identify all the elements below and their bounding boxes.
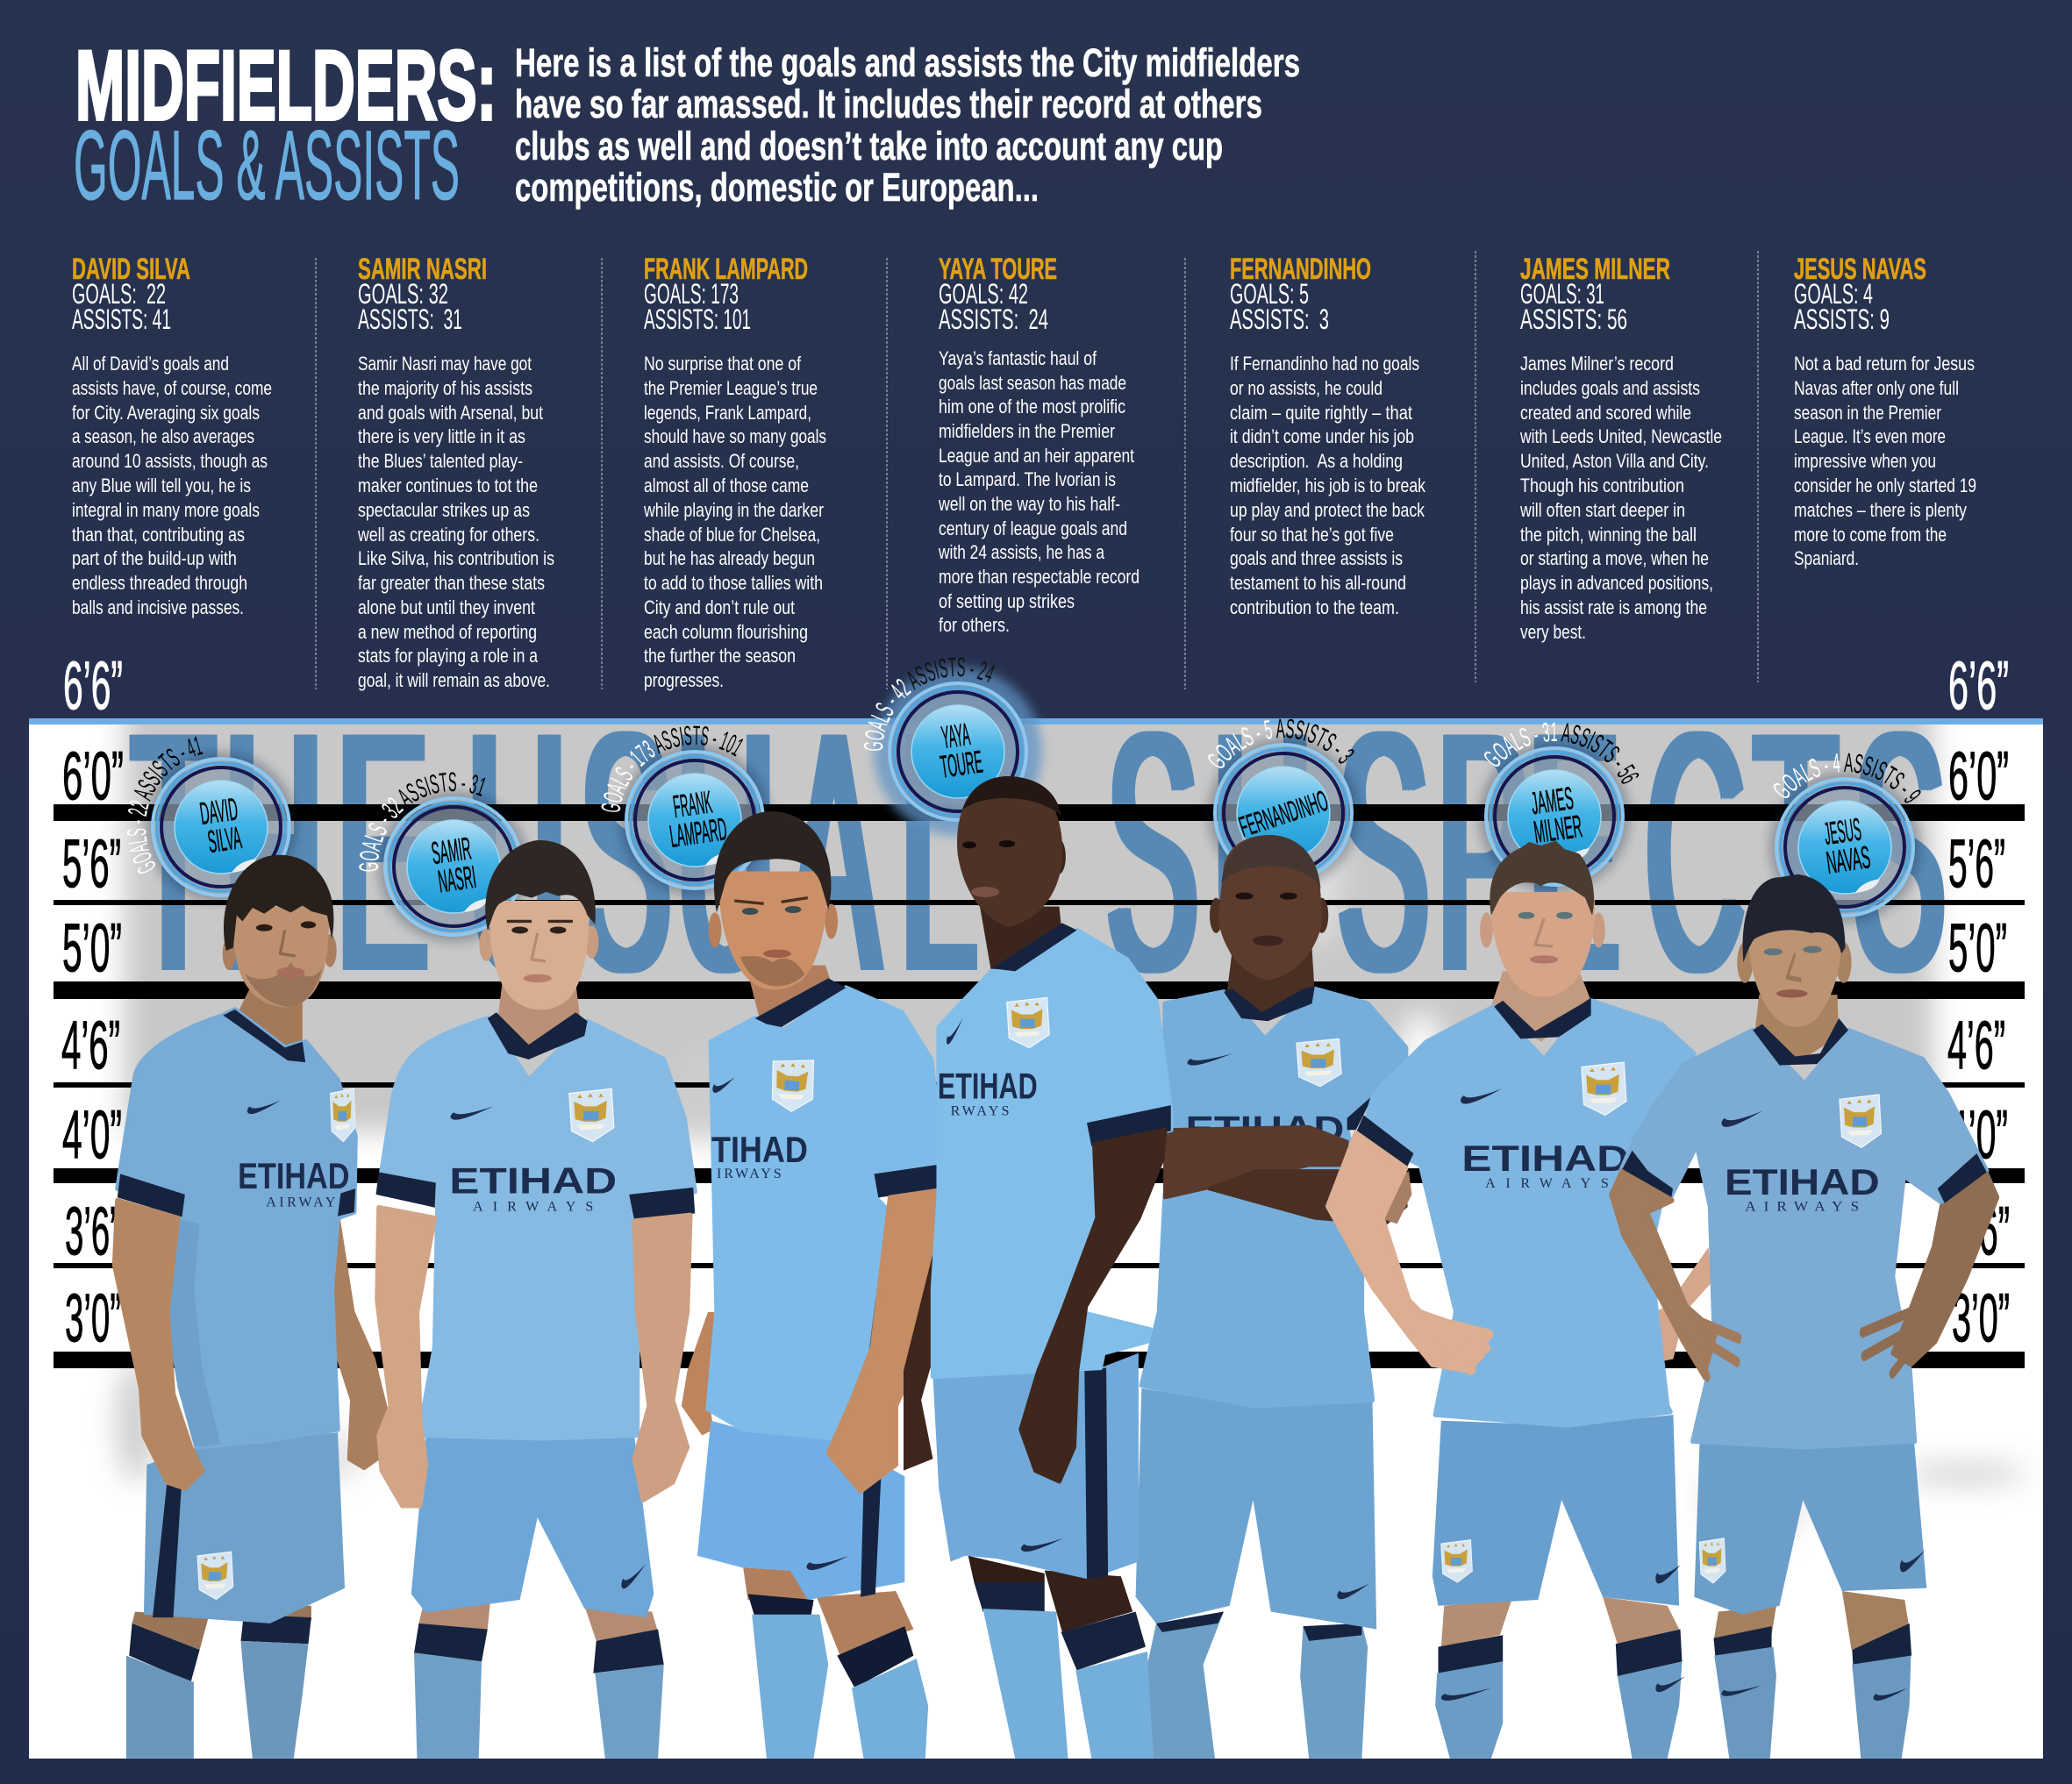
column: Samir Nasri: well as creating for others. xyxy=(357,524,539,546)
column: Frank Lampard: shade of blue for Chelsea, xyxy=(644,524,820,546)
column: Yaya Toure: for others. xyxy=(939,614,1010,636)
sponsor: Etihad Airways xyxy=(449,1160,617,1215)
badge: Yaya Toure: YAYA xyxy=(940,716,972,755)
sponsor: Etihad Airways: AIRWAYS xyxy=(473,1200,593,1215)
column: David Silva: GOALS: 22 xyxy=(72,278,166,310)
column: Yaya Toure: with 24 assists, he has a xyxy=(938,541,1104,563)
column: Frank Lampard: FRANK LAMPARD xyxy=(644,253,808,286)
column: Jesus Navas: ASSISTS: 9 xyxy=(1794,303,1890,335)
column: James Milner: United, Aston Villa and City. xyxy=(1520,450,1709,472)
badge: Fernandinho: FERNANDINHO xyxy=(1235,784,1332,843)
badge: Fernandinho: GOALS - 5 ASSISTS - 3 xyxy=(1208,719,1354,768)
big heading: the usual suspects: THE USUAL SUSPECTS xyxy=(132,660,1946,1043)
height labels left: 4’6” xyxy=(61,1006,120,1083)
column: Frank Lampard: No surprise that one of xyxy=(644,353,802,375)
badge: James Milner: GOALS - 31 ASSISTS - 56 xyxy=(1484,723,1639,784)
column: Frank Lampard: progresses. xyxy=(644,669,724,691)
sponsor: Etihad Airways: RWAYS xyxy=(951,1103,1010,1118)
column: Fernandinho: claim – quite rightly – that xyxy=(1230,402,1413,424)
column: David Silva: any Blue will tell you, he is xyxy=(72,475,251,496)
column: Frank Lampard: the further the season xyxy=(644,645,796,667)
column: James Milner: plays in advanced positions, xyxy=(1520,572,1713,594)
column: Yaya Toure: century of league goals and xyxy=(939,517,1127,539)
badge: David Silva xyxy=(126,737,300,908)
intro text: competitions, domestic or European... xyxy=(515,165,1039,210)
column: Samir Nasri: and goals with Arsenal, but xyxy=(358,402,544,424)
column: Samir Nasri: goal, it will remain as above. xyxy=(358,669,550,691)
height labels left xyxy=(61,646,124,1356)
column: Yaya Toure: YAYA TOURE xyxy=(939,253,1057,286)
column: David Silva: a season, he also averages xyxy=(72,425,254,447)
column: David Silva: around 10 assists, though as xyxy=(72,450,268,472)
column: James Milner: his assist rate is among the xyxy=(1520,596,1707,618)
column: Jesus Navas: GOALS: 4 xyxy=(1794,278,1873,310)
column: Fernandinho: description. As a holding xyxy=(1230,450,1403,472)
badge: Yaya Toure: TOURE xyxy=(938,743,985,785)
badge: Frank Lampard: GOALS - 173 ASSISTS - 101 xyxy=(602,726,744,812)
big heading: the usual suspects: THE USUAL SUSPECTS xyxy=(134,660,1948,1043)
player: David Silva xyxy=(114,855,388,1759)
column: Fernandinho: it didn’t come under his job xyxy=(1230,425,1414,447)
sponsor: Etihad Airways: AIRWAYS xyxy=(1485,1176,1609,1191)
badge: James Milner: MILNER xyxy=(1532,808,1584,850)
height labels left: 5’0” xyxy=(62,909,122,986)
height labels left: 3’0” xyxy=(65,1279,121,1356)
column: Frank Lampard: and assists. Of course, xyxy=(644,450,799,472)
column: James Milner: ASSISTS: 56 xyxy=(1520,303,1627,335)
badge: Frank Lampard xyxy=(602,726,774,900)
height labels left: 5’6” xyxy=(62,824,121,902)
column: Yaya Toure: him one of the most prolific xyxy=(939,396,1125,417)
column: David Silva xyxy=(72,253,272,618)
column: David Silva: than that, contributing as xyxy=(72,524,245,546)
column: David Silva: part of the build-up with xyxy=(72,547,237,569)
column: David Silva: ASSISTS: 41 xyxy=(72,303,171,335)
column: Frank Lampard: each column flourishing xyxy=(644,621,808,643)
badge: Jesus Navas: NAVAS xyxy=(1824,838,1873,881)
column: James Milner: the pitch, winning the ball xyxy=(1520,524,1697,546)
column: Samir Nasri xyxy=(357,253,554,691)
column: Frank Lampard: while playing in the darker xyxy=(643,499,824,521)
column: Jesus Navas xyxy=(1794,253,1976,569)
badge: Samir Nasri xyxy=(359,772,530,947)
column: Yaya Toure xyxy=(938,253,1140,636)
column: James Milner xyxy=(1519,253,1722,643)
sponsor: Etihad Airways: ETIHAD xyxy=(938,1066,1038,1107)
player: James Milner xyxy=(1328,841,1711,1759)
column: James Milner: GOALS: 31 xyxy=(1520,278,1604,310)
badge: David Silva: GOALS - 22 ASSISTS - 41 xyxy=(126,737,204,874)
title: midfielders: MIDFIELDERS: xyxy=(75,31,497,140)
column: Jesus Navas: Not a bad return for Jesus xyxy=(1794,353,1975,375)
column: Fernandinho: FERNANDINHO xyxy=(1230,253,1371,286)
column: Frank Lampard: ASSISTS: 101 xyxy=(644,303,751,335)
height labels right xyxy=(1947,646,2010,1356)
column: David Silva: integral in many more goals xyxy=(72,499,260,521)
height labels right: 3’0” xyxy=(1952,1279,2010,1356)
intro text: Here is a list of the goals and assists the City midfielders xyxy=(515,40,1300,85)
column: James Milner: includes goals and assists xyxy=(1520,377,1700,399)
sponsor: Etihad Airways: AIRWAYS xyxy=(1745,1198,1859,1215)
height labels right: 5’6” xyxy=(1948,824,2005,902)
height chart panel xyxy=(29,718,2043,1759)
column: Fernandinho: If Fernandinho had no goals xyxy=(1230,353,1419,375)
sponsor: Etihad Airways: ETIHAD xyxy=(1725,1163,1880,1203)
column: David Silva: balls and incisive passes. xyxy=(72,596,244,618)
text: GOALS & ASSISTS xyxy=(74,111,460,220)
height labels right: 3’6” xyxy=(1952,1192,2010,1269)
column: James Milner: James Milner’s record xyxy=(1520,353,1674,375)
sponsor: Etihad Airways: TIHAD xyxy=(711,1129,808,1170)
column: Fernandinho: GOALS: 5 xyxy=(1230,278,1309,310)
sponsor: Etihad: ETIHAD xyxy=(1186,1109,1344,1150)
column: Jesus Navas: impressive when you xyxy=(1794,450,1936,472)
column: David Silva: assists have, of course, come xyxy=(72,377,272,399)
big heading: the usual suspects: THE USUAL SUSPECTS xyxy=(129,660,1943,1043)
column: Samir Nasri: there is very little in it as xyxy=(358,425,525,447)
height labels left: 6’0” xyxy=(62,737,124,814)
badge: Samir Nasri: GOALS - 32 ASSISTS - 31 xyxy=(359,772,486,872)
column: Samir Nasri: far greater than these stats xyxy=(358,572,545,594)
players: first group xyxy=(114,840,695,1759)
column: Fernandinho: four so that he’s got five xyxy=(1230,524,1394,546)
column: David Silva: All of David’s goals and xyxy=(72,353,229,375)
player: Yaya Toure xyxy=(904,776,1171,1759)
column: Frank Lampard xyxy=(643,253,826,691)
sponsor: Etihad Airways xyxy=(1461,1138,1629,1191)
column: Samir Nasri: SAMIR NASRI xyxy=(358,253,487,286)
player: Jesus Navas xyxy=(1611,874,1998,1759)
big heading: the usual suspects: THE USUAL SUSPECTS xyxy=(137,660,1951,1043)
column: Samir Nasri: alone but until they invent xyxy=(358,596,536,618)
column: Yaya Toure: League and an heir apparent xyxy=(939,445,1135,467)
intro text: have so far amassed. It includes their record at others xyxy=(515,82,1262,126)
column: Samir Nasri: Like Silva, his contribution is xyxy=(358,547,554,569)
column: Jesus Navas: Spaniard. xyxy=(1794,547,1859,569)
player: Samir Nasri xyxy=(376,840,695,1759)
column: James Milner: created and scored while xyxy=(1520,402,1691,424)
column: Frank Lampard: the Premier League’s true xyxy=(644,377,818,399)
column: Yaya Toure: well on the way to his half- xyxy=(938,493,1120,515)
column: Frank Lampard: almost all of those came xyxy=(644,475,809,496)
badge: Fernandinho xyxy=(1204,719,1362,885)
column: Jesus Navas: season in the Premier xyxy=(1794,402,1941,424)
badge: Yaya Toure: GOALS - 42 ASSISTS - 24 xyxy=(863,657,995,751)
big heading: the usual suspects: THE USUAL SUSPECTS xyxy=(126,660,1940,1043)
badge: Jesus Navas: GOALS - 4 ASSISTS - 9 xyxy=(1774,753,1921,803)
intro text xyxy=(515,40,1300,210)
sponsor: Etihad Airways: ETIHAD xyxy=(449,1160,617,1202)
sponsor: Etihad Airways: ETIHAD xyxy=(238,1155,349,1196)
column: David Silva: endless threaded through xyxy=(72,572,247,594)
column: Yaya Toure: midfielders in the Premier xyxy=(939,420,1115,442)
column: Samir Nasri: ASSISTS: 31 xyxy=(358,303,462,335)
column: Yaya Toure: Yaya’s fantastic haul of xyxy=(939,347,1097,369)
title: midfielders xyxy=(74,31,497,220)
column: James Milner: or starting a move, when he xyxy=(1520,547,1709,569)
column: Fernandinho: goals and three assists is xyxy=(1230,547,1403,569)
sponsor: Etihad Airways: ETIHAD xyxy=(1461,1138,1629,1179)
height labels left: 6’6” xyxy=(63,646,123,724)
column: Frank Lampard: legends, Frank Lampard, xyxy=(644,402,811,424)
column: Fernandinho: up play and protect the back xyxy=(1230,499,1425,521)
column: Yaya Toure: GOALS: 42 xyxy=(939,278,1028,310)
badge: James Milner xyxy=(1474,723,1639,892)
column: Jesus Navas: JESUS NAVAS xyxy=(1794,253,1926,286)
column: Yaya Toure: of setting up strikes xyxy=(939,590,1075,612)
column: Jesus Navas: League. It’s even more xyxy=(1794,425,1946,447)
height labels right: 6’6” xyxy=(1948,646,2009,724)
column: David Silva: DAVID SILVA xyxy=(72,253,190,286)
column: Fernandinho: contribution to the team. xyxy=(1230,596,1399,618)
badge: Jesus Navas: JESUS xyxy=(1822,810,1863,852)
sponsor: Etihad Airways: IRWAYS xyxy=(717,1167,782,1181)
badge: David Silva: DAVID xyxy=(197,790,240,831)
column: Samir Nasri: GOALS: 32 xyxy=(358,278,448,310)
badge: James Milner: JAMES xyxy=(1529,780,1575,821)
column: Frank Lampard: City and don’t rule out xyxy=(644,596,796,618)
badge: Frank Lampard: LAMPARD xyxy=(668,810,729,854)
sponsor: Etihad Airways: AIRWAY xyxy=(266,1195,336,1210)
column: James Milner: very best. xyxy=(1520,621,1586,643)
column: Yaya Toure: more than respectable record xyxy=(939,566,1140,588)
player: Fernandinho xyxy=(1136,835,1406,1759)
badge: Samir Nasri: SAMIR xyxy=(429,830,474,871)
height labels right: 6’0” xyxy=(1948,737,2009,814)
column: Samir Nasri: spectacular strikes up as xyxy=(358,499,530,521)
column: James Milner: will often start deeper in xyxy=(1519,499,1685,521)
badge: Samir Nasri: NASRI xyxy=(436,859,478,899)
column: Samir Nasri: stats for playing a role in a xyxy=(358,645,538,667)
height labels right: 5’0” xyxy=(1948,909,2007,986)
column: Jesus Navas: more to come from the xyxy=(1794,524,1947,546)
column: Samir Nasri: a new method of reporting xyxy=(358,621,537,643)
column: Jesus Navas: matches – there is plenty xyxy=(1794,499,1968,521)
column: Samir Nasri: Samir Nasri may have got xyxy=(358,353,532,375)
sponsor: Etihad Airways xyxy=(238,1155,349,1210)
badge: David Silva: SILVA xyxy=(205,819,244,860)
column: Yaya Toure: goals last season has made xyxy=(939,372,1126,394)
column: Jesus Navas: consider he only started 19 xyxy=(1794,475,1976,496)
player: Lampard xyxy=(682,811,943,1759)
column: Frank Lampard: to add to those tallies with xyxy=(644,572,823,594)
column: Fernandinho: ASSISTS: 3 xyxy=(1230,303,1329,335)
column: Fernandinho xyxy=(1230,253,1426,618)
badge: Jesus Navas xyxy=(1764,753,1926,928)
column: Jesus Navas: Navas after only one full xyxy=(1794,377,1959,399)
column: Fernandinho: or no assists, he could xyxy=(1230,377,1383,399)
column: Samir Nasri: maker continues to tot the xyxy=(358,475,538,496)
badge: Yaya Toure xyxy=(863,657,1048,842)
column: James Milner: JAMES MILNER xyxy=(1520,253,1670,286)
height labels left: 4’0” xyxy=(62,1095,122,1173)
column: Yaya Toure: to Lampard. The Ivorian is xyxy=(939,468,1116,490)
sponsor: Etihad Airways xyxy=(1725,1163,1880,1215)
height labels right: 4’0” xyxy=(1948,1095,2008,1173)
column: James Milner: with Leeds United, Newcastle xyxy=(1519,425,1722,447)
column: Frank Lampard: GOALS: 173 xyxy=(644,278,739,310)
badge: Frank Lampard: FRANK xyxy=(671,783,714,824)
intro text: clubs as well and doesn’t take into account any cup xyxy=(515,124,1223,168)
column: James Milner: Though his contribution xyxy=(1520,475,1684,496)
column: Fernandinho: testament to his all-round xyxy=(1230,572,1406,594)
column: Samir Nasri: the majority of his assists xyxy=(358,377,532,399)
sponsor: Etihad Airways xyxy=(938,1066,1038,1118)
column: Yaya Toure: ASSISTS: 24 xyxy=(939,303,1048,335)
column: David Silva: for City. Averaging six goals xyxy=(72,402,260,424)
height labels right: 4’6” xyxy=(1947,1006,2005,1083)
column: Samir Nasri: the Blues’ talented play- xyxy=(358,450,523,472)
column: Frank Lampard: should have so many goals xyxy=(644,425,826,447)
sponsor: Etihad Airways xyxy=(711,1129,808,1181)
height labels left: 3’6” xyxy=(65,1192,121,1269)
column: Fernandinho: midfielder, his job is to break xyxy=(1230,475,1426,496)
column: Frank Lampard: but he has already begun xyxy=(644,547,815,569)
